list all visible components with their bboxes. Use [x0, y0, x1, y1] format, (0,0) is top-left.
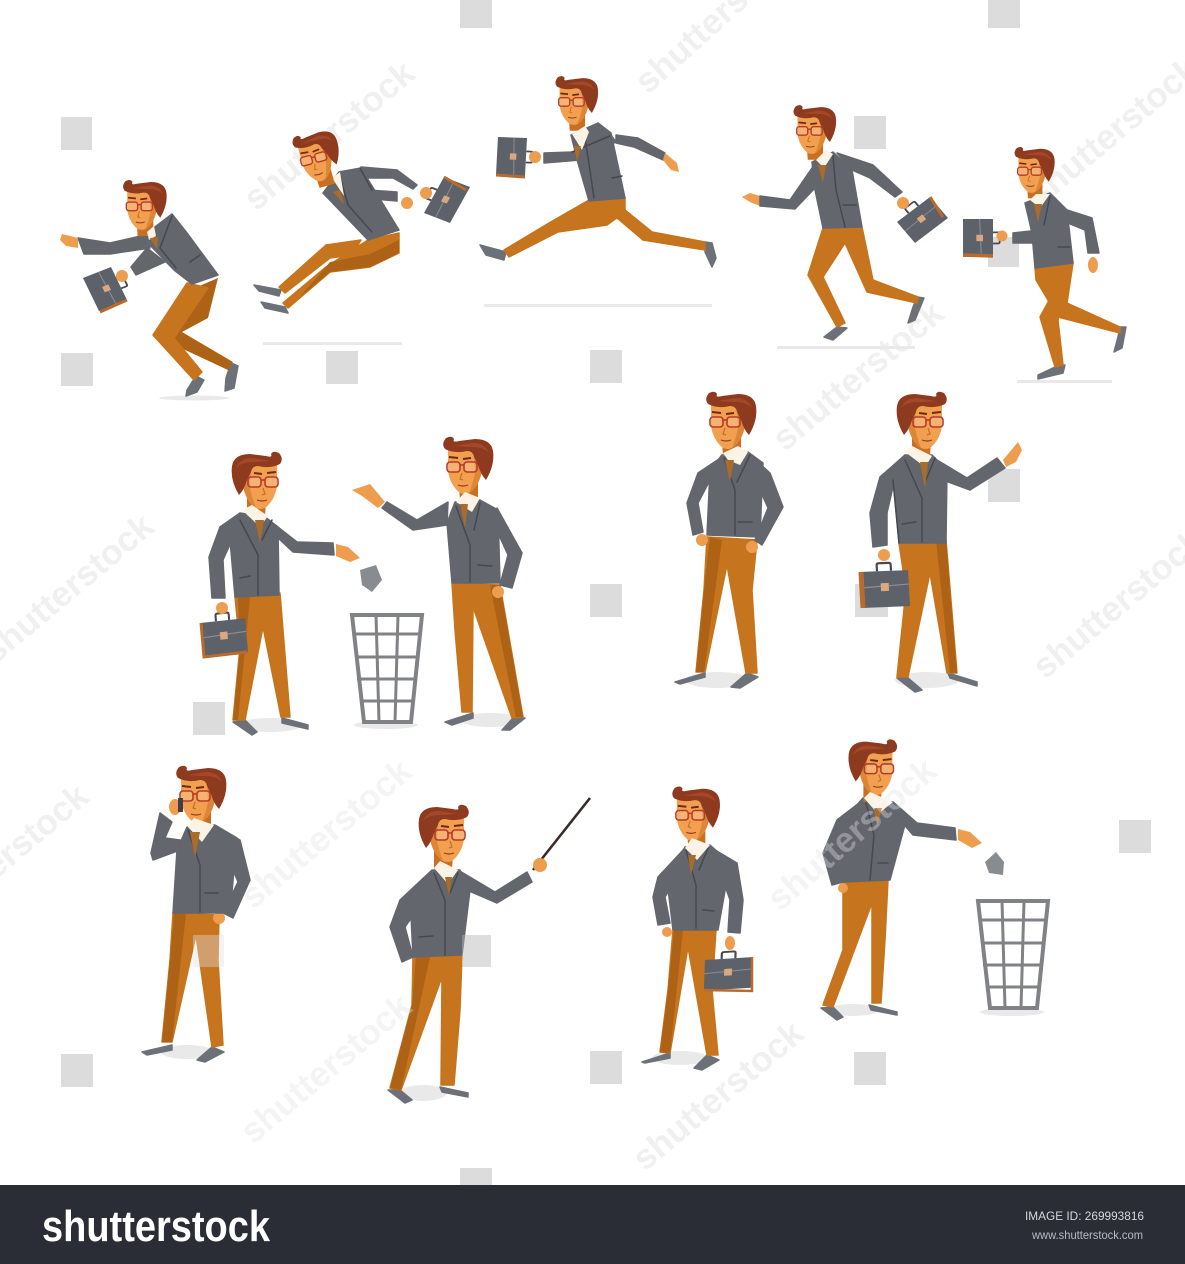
watermark overlay [193, 750, 944, 1151]
figure: man presenting with pointer [388, 798, 590, 1103]
figure: man running left with briefcase [742, 105, 948, 349]
watermark layer: shutterstock [765, 293, 951, 458]
watermark overlay: shutterstock [760, 750, 944, 918]
wastebasket [352, 615, 422, 729]
paper ball [360, 565, 382, 592]
image id: IMAGE ID: 269993816 [1025, 1209, 1144, 1223]
site url: www.shutterstock.com [1031, 1228, 1143, 1242]
briefcase [83, 265, 133, 311]
watermark layer: shutterstock [233, 751, 419, 916]
watermark overlay: shutterstock [233, 751, 419, 916]
watermark layer: shutterstock [236, 53, 422, 218]
figure: man throwing paper, holding briefcase [199, 452, 382, 735]
figure: man falling backward [254, 126, 470, 345]
figure: crouching man with briefcase [60, 180, 238, 400]
figure: man on the phone [142, 766, 250, 1062]
paper ball [985, 852, 1004, 875]
figure: man tossing paper into basket [821, 739, 1004, 1020]
briefcase [963, 219, 1000, 257]
figure: man holding briefcase at his side [642, 787, 752, 1070]
figure: man running with briefcase [963, 147, 1126, 383]
figure: man gesturing toward wastebasket [352, 437, 525, 730]
figure: man leaping with briefcase [480, 76, 716, 307]
briefcase [860, 562, 910, 608]
briefcase [418, 175, 470, 223]
briefcase [893, 192, 948, 243]
logo wordmark: shutterstock [42, 1202, 270, 1251]
watermark layer: shutterstock [625, 1013, 811, 1178]
watermark overlay: shutterstock [233, 986, 419, 1151]
footer bar [0, 1185, 1185, 1264]
briefcase [704, 950, 752, 991]
briefcase [199, 611, 248, 657]
briefcase [496, 137, 533, 176]
figure: man with briefcase and raised hand [860, 392, 1022, 692]
figure: man with hands in pockets [675, 392, 783, 688]
wastebasket [978, 901, 1048, 1016]
watermark layer: shutterstock [233, 986, 419, 1151]
watermark layer: shutterstock [760, 750, 944, 918]
pointer [533, 798, 590, 870]
